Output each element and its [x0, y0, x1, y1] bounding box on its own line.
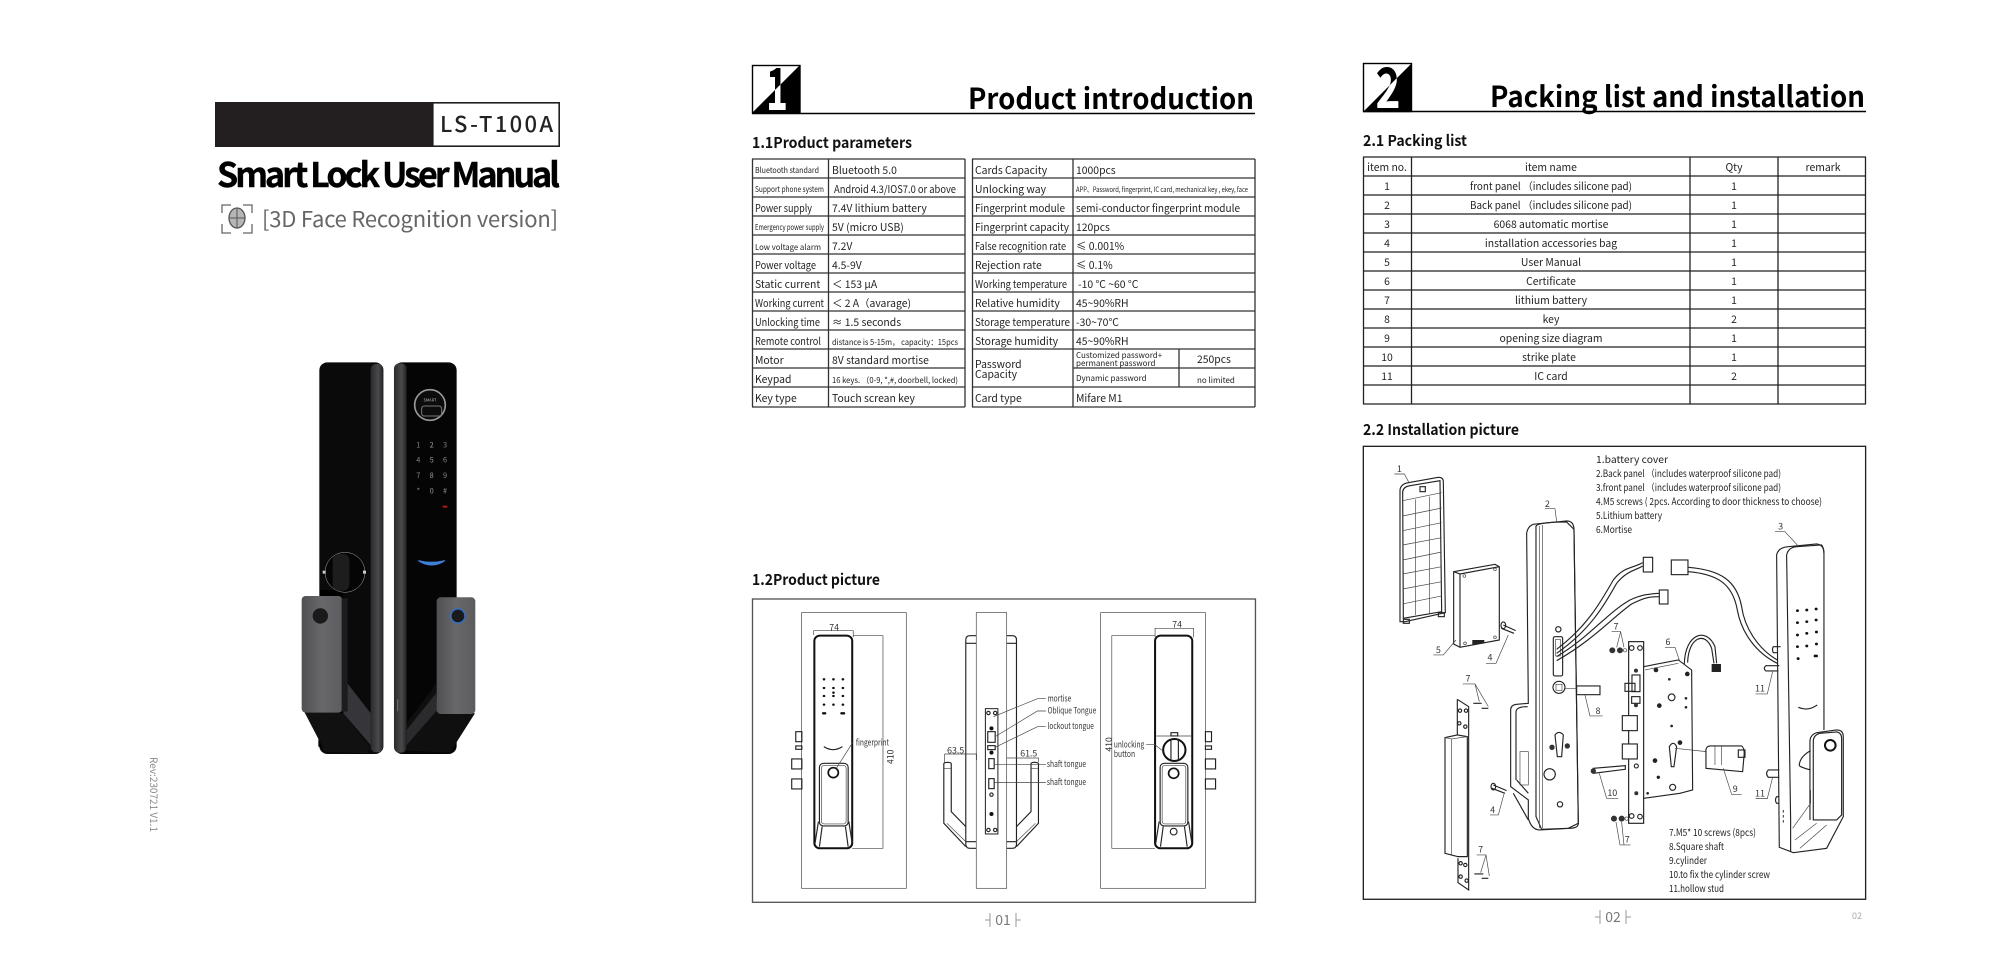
page number 01: 01 [995, 910, 1011, 930]
table: parameters right: semi-conductor fingerprint module [1076, 200, 1240, 215]
model banner [215, 102, 560, 147]
side view of lock with labels: mortise [1048, 691, 1071, 704]
part 5: lithium battery: 5 [1436, 643, 1441, 656]
part 7: strike plate: 7 [1465, 671, 1470, 684]
table: packing list: remark [1806, 159, 1841, 174]
table: parameters right: Customized password+ [1076, 350, 1163, 361]
corner page mark: 02 [1852, 909, 1862, 922]
table: parameters left: Support phone system [755, 184, 824, 195]
parts list lower: 9.cylinder [1669, 853, 1707, 867]
front panel of lock: # [443, 485, 447, 496]
table: parameters right: 45~90%RH [1076, 333, 1129, 348]
table: parameters right: 120pcs [1076, 219, 1110, 234]
table: parameters right: permanent password [1076, 358, 1155, 369]
table: parameters left: ≈ 1.5 seconds [832, 314, 901, 329]
table: packing list: 1 [1731, 197, 1737, 212]
icon: section number 2 [1362, 62, 1412, 112]
table: parameters right: Password [975, 356, 1022, 371]
icon: section number 1 [752, 64, 801, 114]
table: parameters right: Capacity [975, 366, 1018, 381]
table: packing list: 3 [1384, 216, 1390, 231]
table: packing list: 1 [1731, 273, 1737, 288]
side view of lock with labels: Oblique Tongue [1048, 704, 1096, 717]
page number 02 [1595, 907, 1631, 927]
back view of lock: button [1114, 747, 1135, 760]
front panel of lock: 4 [416, 455, 420, 466]
heading: product picture: 1.2Product picture [752, 569, 880, 590]
table: packing list: strike plate [1522, 349, 1576, 364]
part 3: front panel: 3 [1778, 519, 1783, 532]
parts list upper: 4.M5 screws ( 2pcs. According to door thickness to choose) [1596, 494, 1822, 508]
table: parameters left: Working current [755, 295, 824, 310]
table: parameters left: ＜ 2 A（avarage) [832, 295, 911, 310]
front panel of lock: 9 [443, 470, 447, 481]
table: packing list: 1 [1384, 178, 1390, 193]
part 5: lithium battery [1433, 564, 1499, 656]
front panel of lock: 5 [430, 455, 434, 466]
door outline: front view [802, 613, 906, 888]
table: parameters right: Cards Capacity [975, 162, 1048, 177]
panel: page 02 packing list and installation [1363, 44, 1866, 927]
table: parameters right: 45~90%RH [1076, 295, 1129, 310]
icon: face recognition [222, 205, 252, 233]
model banner: LS-T100A [440, 107, 553, 139]
table: parameters right: Card type [975, 390, 1022, 405]
icon: section number 2: 2 [1376, 44, 1400, 125]
table: parameters left: Touch screan key [832, 390, 916, 405]
table: parameters left: Emergency power supply [755, 222, 825, 233]
part 10: cylinder screw [1591, 766, 1625, 799]
table: packing list: front panel （includes silicone pad) [1470, 178, 1632, 193]
parts list lower [1669, 825, 1770, 895]
table: parameters right: ≤ 0.1% [1076, 257, 1113, 272]
table: packing list: 5 [1384, 254, 1390, 269]
cover subtitle: [3D Face Recognition version] [262, 202, 558, 234]
side view of lock with labels: shaft tongue [1047, 757, 1086, 770]
front view of lock: 74 [829, 621, 839, 634]
table: packing list: Certificate [1526, 273, 1576, 288]
front panel of lock: 6 [443, 455, 447, 466]
table: packing list: key [1543, 311, 1560, 326]
part 4: screw bottom [1490, 783, 1507, 816]
table: parameters left: Key type [755, 390, 797, 405]
table: parameters left: 7.2V [832, 238, 852, 253]
table: parameters left: Power voltage [755, 257, 816, 272]
part 2: back panel [1511, 497, 1578, 830]
front view of lock [792, 621, 896, 848]
part 7: mortise screws: 7 [1613, 619, 1618, 632]
table: packing list: 4 [1384, 235, 1390, 250]
table: packing list: 1 [1731, 254, 1737, 269]
table: parameters left: Power supply [755, 200, 812, 215]
table: packing list: lithium battery [1515, 292, 1588, 307]
table: packing list: 1 [1731, 292, 1737, 307]
table: parameters right: Storage humidity [975, 333, 1059, 348]
table: packing list: 2 [1731, 368, 1737, 383]
table: parameters right: Fingerprint capacity [975, 219, 1070, 234]
table: packing list: 8 [1384, 311, 1390, 326]
table: parameters left: Unlocking time [755, 314, 820, 329]
section title rule [752, 112, 1255, 114]
table: parameters left: Motor [755, 352, 785, 367]
heading: packing list: 2.1 Packing list [1363, 130, 1468, 151]
parts list lower: 11.hollow stud [1669, 881, 1724, 895]
parts list upper [1596, 452, 1822, 536]
table: packing list: installation accessories bag [1485, 235, 1617, 250]
part 4: screw top: 4 [1487, 651, 1492, 664]
part 2: back panel: 2 [1545, 497, 1550, 510]
part 7: mortise screws [1609, 619, 1631, 846]
table: packing list: 10 [1381, 349, 1393, 364]
table: parameters left: 4.5-9V [832, 257, 862, 272]
back panel of lock [302, 362, 383, 754]
table: packing list: 1 [1731, 216, 1737, 231]
table: parameters right: Storage temperature [975, 314, 1070, 329]
icon: section number 1: 1 [766, 43, 788, 127]
table: packing list: item no. [1367, 159, 1407, 174]
product photo: smart lock pair [302, 362, 475, 754]
part 11: hollow studs: 11 [1755, 682, 1765, 695]
section title rule [1363, 110, 1866, 112]
part 1: battery cover [1394, 462, 1445, 623]
side view of lock with labels [944, 636, 1096, 848]
front panel of lock: 1 [416, 439, 420, 450]
table: parameters left: Keypad [755, 371, 791, 386]
parts list upper: 6.Mortise [1596, 522, 1632, 536]
part 1: battery cover: 1 [1397, 462, 1402, 475]
table: packing list: 9 [1384, 330, 1390, 345]
icon: section number 2: 2 [1376, 44, 1400, 125]
table: parameters right: Unlocking way [975, 181, 1047, 196]
front view of lock: fingerprint [856, 735, 890, 748]
parts list lower: 7.M5* 10 screws (8pcs) [1669, 825, 1756, 839]
table: packing list: Back panel （includes silicone pad) [1470, 197, 1632, 212]
table: packing list: opening size diagram [1499, 330, 1603, 345]
table: packing list [1363, 157, 1866, 404]
table: parameters right: APP、Password, fingerprint, IC card, mechanical key , ekey, face [1076, 185, 1248, 195]
front panel of lock: 3 [443, 439, 447, 450]
wire harness [1557, 563, 1659, 661]
diagram: exploded installation view [1363, 446, 1866, 899]
table: packing list: 2 [1384, 197, 1390, 212]
table: parameters left [752, 159, 965, 407]
side view of lock with labels: lockout tongue [1048, 719, 1094, 732]
table: packing list: 6068 automatic mortise [1494, 216, 1609, 231]
parts list upper: 1.battery cover [1596, 452, 1668, 466]
part 8: square shaft [1564, 686, 1603, 717]
parts list upper: 2.Back panel （includes waterproof silicone pad) [1596, 466, 1781, 480]
table: parameters left: Remote control [755, 333, 821, 348]
table: parameters left: Bluetooth 5.0 [832, 162, 897, 177]
door outline: side view [976, 613, 1007, 888]
back view of lock: 74 [1172, 617, 1182, 630]
back view of lock [1102, 617, 1216, 848]
side view of lock with labels: 61.5 [1020, 746, 1037, 759]
front panel of lock [394, 362, 475, 754]
parts list lower: 10.to fix the cylinder screw [1669, 867, 1770, 881]
table: parameters right: 1000pcs [1076, 162, 1116, 177]
part 4: screw bottom: 4 [1490, 803, 1495, 816]
part 9: cylinder: 9 [1733, 782, 1738, 795]
table: parameters right: Fingerprint module [975, 200, 1065, 215]
part 11: hollow studs: 11 [1755, 787, 1765, 800]
door outline: back view [1101, 613, 1205, 888]
heading: product introduction: Product introduction [968, 76, 1254, 118]
back view of lock: 410 [1102, 737, 1115, 752]
panel: page 01 product introduction [752, 43, 1255, 930]
back view of lock: unlocking [1114, 737, 1144, 750]
table: parameters right: Mifare M1 [1076, 390, 1123, 405]
part 7: mortise screws: 7 [1625, 833, 1630, 846]
table: parameters right: -30~70°C [1076, 314, 1119, 329]
part 6: mortise [1622, 635, 1721, 823]
table: parameters left: Low voltage alarm [755, 242, 821, 253]
table: packing list: 11 [1381, 368, 1393, 383]
table: parameters left: 8V standard mortise [832, 352, 929, 367]
table: packing list: 1 [1731, 330, 1737, 345]
table: packing list: 7 [1384, 292, 1390, 307]
revision note: Rev:230721 V1.1 [147, 757, 162, 832]
table: parameters left: ＜ 153 μA [832, 276, 878, 291]
part 7: strike plate [1445, 671, 1489, 890]
front panel of lock: 7 [416, 470, 420, 481]
heading: packing list and installation: Packing list and installation [1490, 74, 1865, 116]
table: packing list: Qty [1725, 159, 1743, 174]
parts list upper: 5.Lithium battery [1596, 508, 1662, 522]
table: parameters right: Rejection rate [975, 257, 1042, 272]
table: packing list: 1 [1731, 178, 1737, 193]
table: parameters left: 16 keys. （0-9, *,#, doorbell, locked) [832, 375, 958, 386]
part 7: strike plate: 7 [1478, 843, 1483, 856]
table: parameters left: 7.4V lithium battery [832, 200, 927, 215]
table: parameters left: distance is 5-15m， capacity：15pcs [832, 337, 958, 348]
part 3: front panel [1775, 519, 1843, 853]
parts list upper: 3.front panel （includes waterproof silicone pad) [1596, 480, 1781, 494]
table: parameters right: Working temperature [975, 276, 1067, 291]
heading: product parameters: 1.1Product parameters [752, 132, 912, 153]
front panel of lock: * [417, 485, 420, 496]
side view of lock with labels: 63.5 [947, 743, 964, 756]
heading: installation picture: 2.2 Installation picture [1363, 419, 1519, 440]
table: packing list: IC card [1534, 368, 1568, 383]
cover title: Smart Lock User Manual [217, 148, 560, 197]
wire connectors [1643, 557, 1777, 663]
table: parameters left: Android 4.3/IOS7.0 or above [834, 181, 956, 196]
part 6: mortise: 6 [1665, 635, 1670, 648]
table: packing list: 1 [1731, 349, 1737, 364]
side view of lock with labels: shaft tongue [1047, 775, 1086, 788]
table: parameters left: Bluetooth standard [755, 165, 819, 176]
front panel of lock: SMART [424, 398, 437, 404]
table: parameters right: Relative humidity [975, 295, 1060, 310]
part 9: cylinder [1675, 746, 1745, 795]
table: parameters left: 5V (micro USB) [832, 219, 904, 234]
table: packing list: 1 [1731, 235, 1737, 250]
part 11: hollow studs [1755, 647, 1811, 823]
front panel of lock: 0 [430, 485, 434, 496]
part 4: screw top [1486, 622, 1516, 664]
table: parameters right: -10 °C ~60 °C [1078, 276, 1139, 291]
front view of lock: 410 [883, 749, 896, 764]
table: parameters right: Dynamic password [1076, 373, 1147, 384]
table: parameters left: Static current [755, 276, 820, 291]
page number 02: 02 [1605, 907, 1621, 927]
table: packing list: item name [1525, 159, 1577, 174]
front panel of lock: 8 [430, 470, 434, 481]
icon: section number 1: 1 [766, 43, 788, 127]
page number 01 [985, 910, 1021, 930]
parts list lower: 8.Square shaft [1669, 839, 1724, 853]
table: packing list: 2 [1731, 311, 1737, 326]
diagram: product dimensions [753, 599, 1255, 902]
panel: cover page [147, 102, 560, 832]
table: parameters right [972, 159, 1255, 407]
front panel of lock: 2 [430, 439, 434, 450]
table: parameters right: no limited [1197, 375, 1235, 386]
table: parameters right: ≤ 0.001% [1076, 238, 1125, 253]
part 8: square shaft: 8 [1595, 704, 1600, 717]
table: parameters right: False recognition rate [975, 238, 1066, 253]
table: packing list: User Manual [1521, 254, 1581, 269]
table: parameters right: 250pcs [1197, 351, 1231, 366]
table: packing list: 6 [1384, 273, 1390, 288]
part 10: cylinder screw: 10 [1607, 786, 1617, 799]
